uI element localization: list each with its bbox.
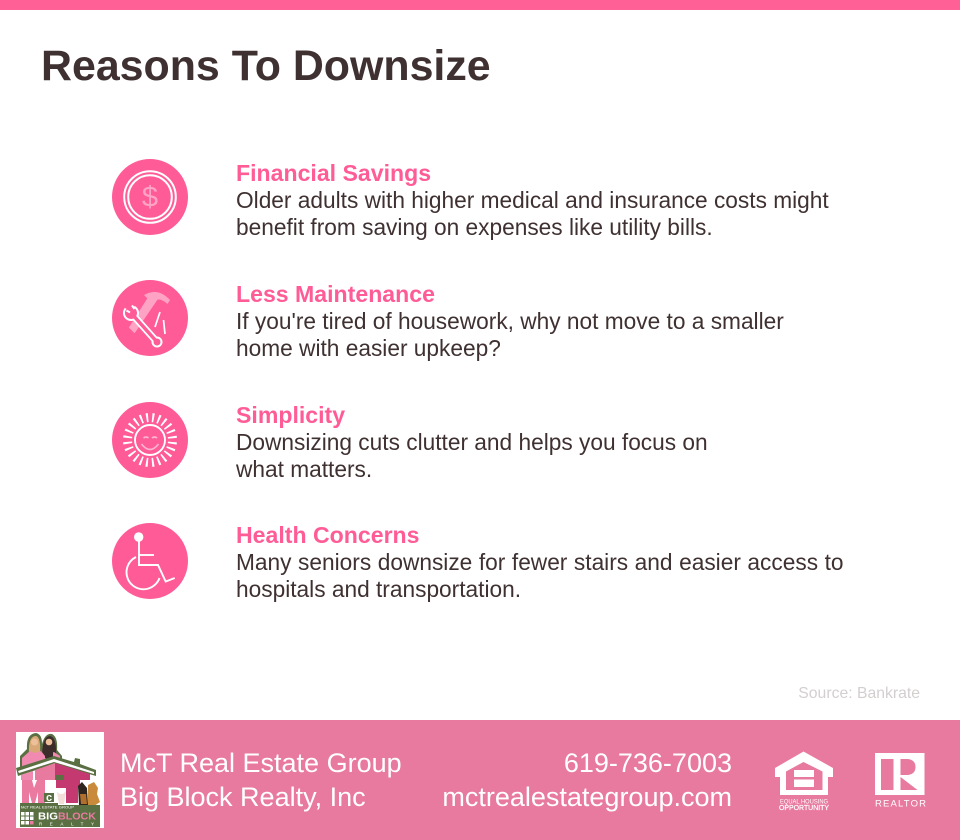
item: financial savings: benefit from saving on expenses like utility bills. (236, 214, 713, 240)
item: financial savings (236, 160, 829, 240)
source note: Source: Bankrate (798, 685, 920, 702)
item: financial savings: Financial Savings (236, 160, 431, 186)
item: health concerns: hospitals and transportation. (236, 576, 521, 602)
item: simplicity: Simplicity (236, 402, 345, 428)
icon: realtor (875, 753, 926, 810)
icon: realtor: REALTOR (875, 798, 926, 810)
item: less maintenance: If you're tired of housework, why not move to a smaller (236, 308, 784, 334)
logo: McT Big Block Realty (16, 732, 104, 828)
item: less maintenance (236, 281, 784, 361)
footer: contact details: 619-736-7003 (564, 748, 732, 778)
item: health concerns (236, 522, 844, 602)
footer: contact details: mctrealestategroup.com (442, 782, 732, 812)
item: less maintenance: Less Maintenance (236, 281, 435, 307)
top bar (0, 0, 960, 10)
icon: hammer and wrench (112, 280, 188, 356)
item: simplicity: Downsizing cuts clutter and helps you focus on (236, 429, 708, 455)
icon: equal housing opportunity (775, 752, 833, 812)
logo: McT Big Block Realty: BIG (38, 812, 58, 822)
icon: dollar coin: $ (142, 182, 158, 214)
item: less maintenance: home with easier upkeep? (236, 335, 501, 361)
icon: wheelchair (112, 523, 188, 599)
title: Reasons To Downsize (41, 42, 491, 90)
footer: company name (120, 748, 402, 812)
logo: McT Big Block Realty: McT REAL ESTATE GROUP (21, 806, 75, 810)
footer: company name: Big Block Realty, Inc (120, 782, 366, 812)
item: financial savings: Older adults with higher medical and insurance costs might (236, 187, 829, 213)
icon: dollar coin (112, 159, 188, 235)
icon: equal housing opportunity: OPPORTUNITY (779, 805, 829, 812)
item: simplicity: what matters. (236, 456, 372, 482)
item: health concerns: Many seniors downsize for fewer stairs and easier access to (236, 549, 844, 575)
footer: contact details (442, 748, 732, 812)
logo: McT Big Block Realty: REALTY (39, 822, 94, 826)
icon: equal housing opportunity: EQUAL HOUSING (780, 798, 828, 806)
footer band (0, 720, 960, 840)
item: health concerns: Health Concerns (236, 522, 420, 548)
icon: smiling sun (112, 402, 188, 478)
logo: McT Big Block Realty: BLOCK (58, 812, 97, 822)
footer: company name: McT Real Estate Group (120, 748, 402, 778)
item: simplicity (236, 402, 708, 482)
logo: McT Big Block Realty: c (46, 792, 52, 804)
